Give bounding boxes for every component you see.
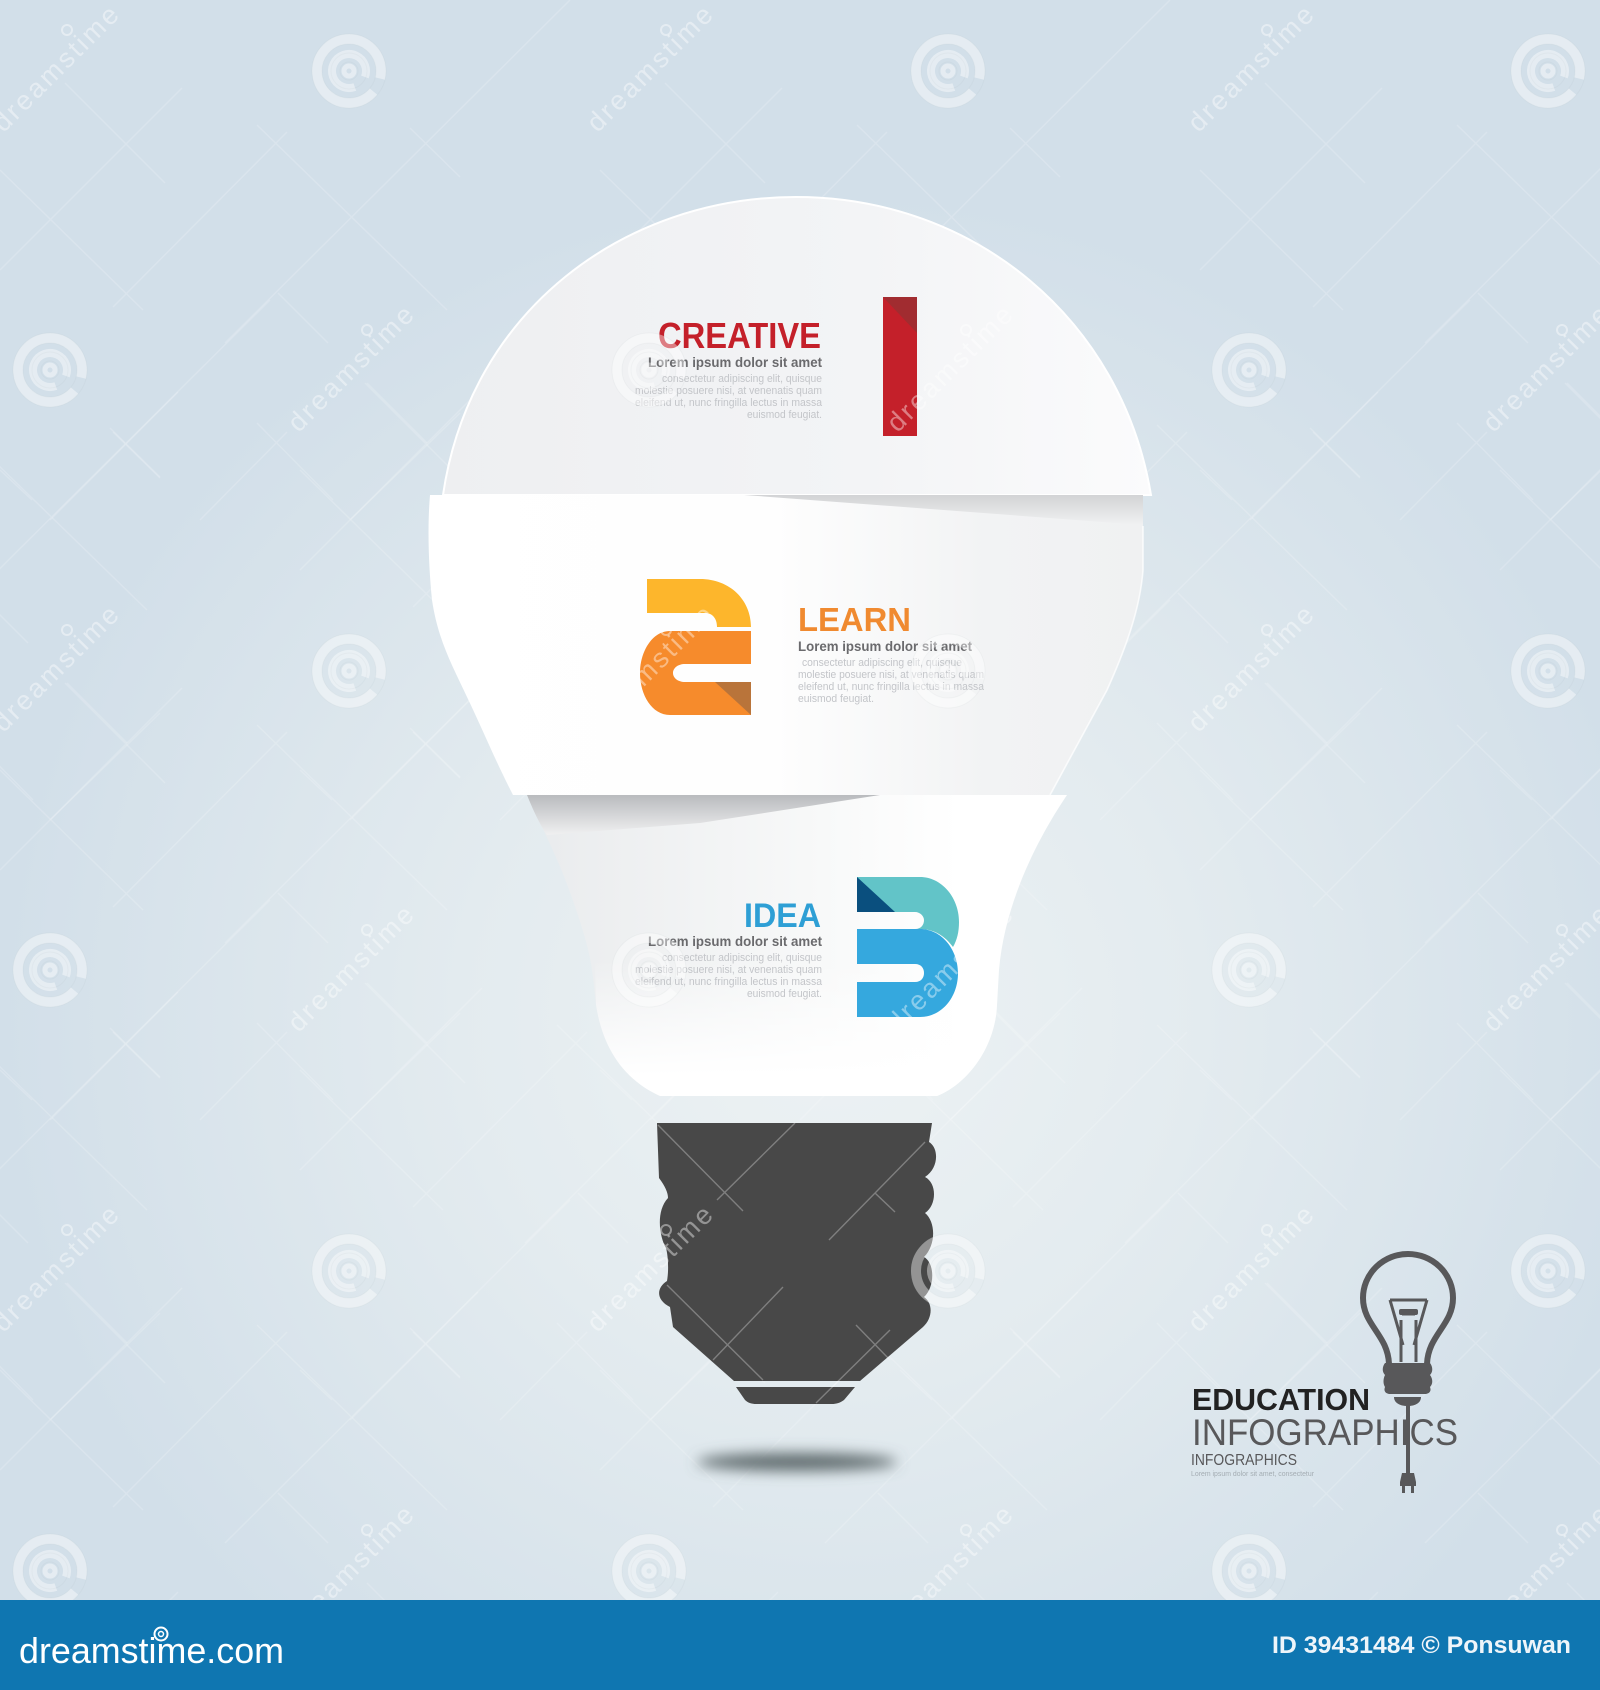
icon: number 2 [640,579,751,715]
panel: idea content [635,877,959,1017]
subheading: idea: Lorem ipsum dolor sit amet [648,934,822,949]
watermark: dreamstime text: dreamstime [581,1200,719,1338]
text block: idea: euismod feugiat. [747,988,822,1000]
panel: creative top section [443,197,1151,495]
text block: creative: consectetur adipiscing elit, quisque [662,373,822,385]
heading: education: EDUCATION [1192,1382,1370,1417]
watermark: dreamstime text: dreamstime [1182,1200,1320,1338]
watermark: dreamstime text: dreamstime [282,300,420,438]
icon: number 1 [883,297,917,436]
shadow under learn section [527,795,880,835]
panel: idea lower section [527,795,1067,1096]
socket watermark lines [658,1123,925,1403]
text block: creative [635,373,823,421]
text block: idea: eleifend ut, nunc fringilla lectus in massa [635,976,823,988]
text block: creative: euismod feugiat. [747,409,822,421]
panel: learn middle section [429,495,1143,795]
panel: light bulb [429,197,1151,1096]
shadow under creative section [744,495,1143,525]
watermark: dreamstime text: dreamstime [1182,0,1320,138]
panel: creative content [635,297,917,436]
icon: brand spiral [154,1628,168,1640]
heading: idea: IDEA [744,897,821,935]
footer banner [0,1600,1600,1690]
socket drop shadow [697,1453,897,1471]
text block: idea [635,952,823,1000]
subheading: creative: Lorem ipsum dolor sit amet [648,355,822,370]
text block: creative: eleifend ut, nunc fringilla lectus in massa [635,397,823,409]
watermark: dreamstime text: dreamstime [581,600,719,738]
watermark: dreamstime text: dreamstime [282,900,420,1038]
text block: learn: eleifend ut, nunc fringilla lectus in massa [798,681,985,693]
text block: learn: euismod feugiat. [798,693,874,705]
watermark: dreamstime text: dreamstime [881,300,1019,438]
panel: learn content [640,579,985,715]
icon: number 3 [857,877,959,1017]
watermark: dreamstime text: dreamstime [881,1500,1019,1638]
brand name: dreamstime.com [19,1630,284,1671]
edge highlight on learn section [1050,526,1143,795]
text block: idea: molestie posuere nisi, at venenatis quam [635,964,822,976]
logo: education infographics [1191,1254,1458,1493]
heading: infographics: INFOGRAPHICS [1192,1412,1458,1453]
highlight on lower section [595,960,999,1096]
icon: bulb with plug [1363,1254,1453,1493]
bulb socket [657,1123,936,1404]
text block: learn [798,657,985,705]
watermark: dreamstime text: dreamstime [881,900,1019,1038]
heading: creative: CREATIVE [658,315,821,356]
heading: learn: LEARN [798,601,911,638]
watermark: dreamstime text: dreamstime [1182,600,1320,738]
subheading: infographics: INFOGRAPHICS [1191,1452,1297,1469]
watermark: dreamstime text: dreamstime [282,1500,420,1638]
text block: learn: consectetur adipiscing elit, quisque [802,657,962,669]
text block: idea: consectetur adipiscing elit, quisque [662,952,822,964]
caption: Lorem ipsum dolor sit amet, consectetur [1191,1471,1315,1478]
image id and credit: ID 39431484 © Ponsuwan [1272,1632,1571,1659]
text block: learn: molestie posuere nisi, at venenatis quam [798,669,984,681]
subheading: learn: Lorem ipsum dolor sit amet [798,639,972,654]
text block: creative: molestie posuere nisi, at venenatis quam [635,385,822,397]
watermark: dreamstime text: dreamstime [581,0,719,138]
